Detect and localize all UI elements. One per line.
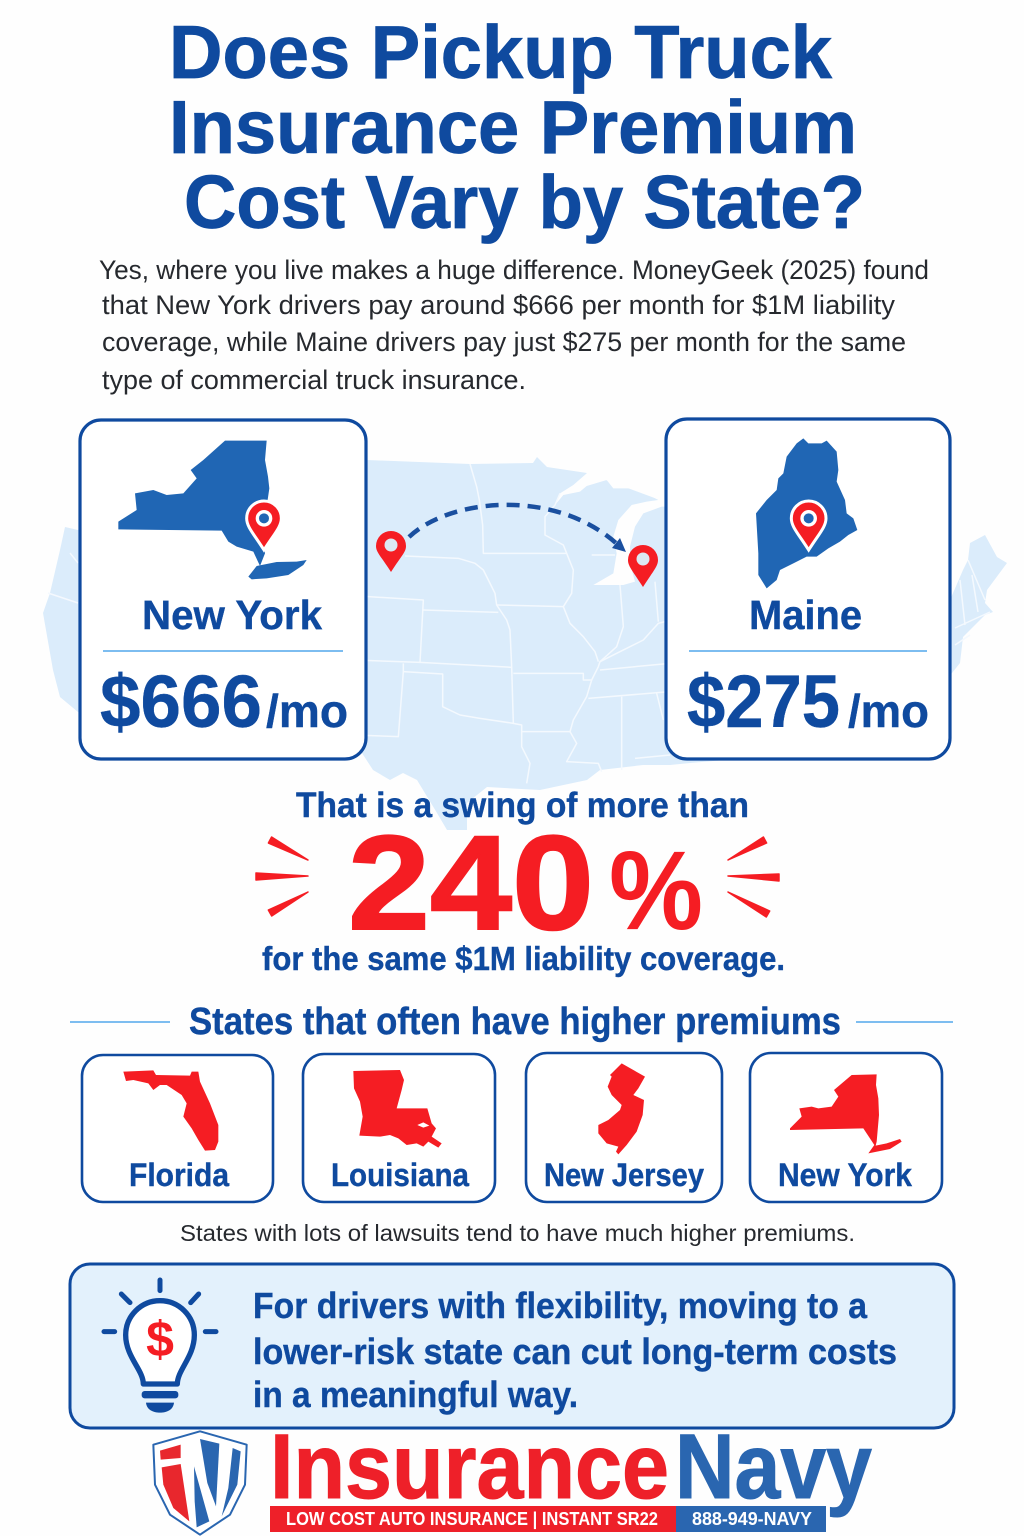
callout text: For drivers with flexibility, moving to a xyxy=(253,1285,868,1326)
icon: New York pin xyxy=(247,501,281,550)
section heading: States that often have higher premiums xyxy=(189,1001,841,1043)
title: Does Pickup Truck xyxy=(169,10,832,94)
logo: tagline band xyxy=(270,1506,826,1532)
icon: New Jersey map xyxy=(598,1063,645,1154)
logo: shield xyxy=(153,1431,247,1535)
card: Florida xyxy=(82,1055,273,1202)
New York price xyxy=(100,660,348,743)
icon: Florida map xyxy=(123,1070,218,1151)
intro paragraph: Yes, where you live makes a huge difference. MoneyGeek (2025) found xyxy=(99,255,929,285)
New York price: $666 xyxy=(100,660,262,743)
coverage caption: for the same $1M liability coverage. xyxy=(262,940,785,977)
New York label: New York xyxy=(142,592,322,638)
lawsuits note: States with lots of lawsuits tend to have much higher premiums. xyxy=(180,1220,855,1246)
Maine price xyxy=(687,660,929,743)
big 240% figure: 240 xyxy=(348,809,594,958)
icon: Maine state map xyxy=(756,438,857,588)
callout text: in a meaningful way. xyxy=(253,1374,578,1415)
intro paragraph: type of commercial truck insurance. xyxy=(102,365,526,395)
map pin: destination xyxy=(628,545,658,587)
big 240% figure xyxy=(348,809,703,958)
panel: Maine xyxy=(666,419,950,759)
title: Insurance Premium xyxy=(169,85,857,169)
intro paragraph: that New York drivers pay around $666 per month for $1M liability xyxy=(102,290,896,320)
New York label: New York xyxy=(778,1157,912,1193)
callout text: lower-risk state can cut long-term costs xyxy=(253,1331,897,1372)
Florida label: Florida xyxy=(129,1157,229,1193)
icon: New York state map xyxy=(118,441,307,579)
New York price: /mo xyxy=(266,685,348,737)
intro paragraph: coverage, while Maine drivers pay just $275 per month for the same xyxy=(102,327,906,357)
New Jersey label: New Jersey xyxy=(544,1157,704,1193)
logo: wordmark: Insurance xyxy=(270,1416,669,1518)
logo: tagline band: 888-949-NAVY xyxy=(692,1509,812,1529)
card: New York xyxy=(750,1053,942,1202)
panel: New York xyxy=(80,420,366,759)
title xyxy=(169,10,865,244)
icon: Maine pin xyxy=(791,501,826,550)
panel: callout tip xyxy=(70,1264,954,1428)
icon: light bulb with dollar sign xyxy=(104,1280,216,1413)
burst rays xyxy=(256,837,779,917)
map pin: origin xyxy=(376,531,406,572)
icon: light bulb with dollar sign: $ xyxy=(146,1312,174,1368)
icon: Louisiana map xyxy=(353,1070,442,1148)
swing lead-in text: That is a swing of more than xyxy=(296,786,749,825)
card: New Jersey xyxy=(526,1053,722,1202)
Maine price: $275 xyxy=(687,660,840,743)
Maine price: /mo xyxy=(848,685,929,737)
dashed route arrow xyxy=(409,505,626,552)
Louisiana label: Louisiana xyxy=(331,1157,469,1193)
title: Cost Vary by State? xyxy=(184,160,865,244)
logo: tagline band: LOW COST AUTO INSURANCE | INSTANT SR22 xyxy=(286,1509,658,1529)
intro paragraph xyxy=(99,255,929,395)
logo: wordmark: Navy xyxy=(675,1416,872,1518)
card: Louisiana xyxy=(303,1054,495,1202)
background US map xyxy=(43,450,1007,830)
big 240% figure: % xyxy=(609,828,703,953)
Maine label: Maine xyxy=(749,592,862,638)
callout text xyxy=(253,1285,897,1415)
icon: New York map xyxy=(790,1074,902,1153)
